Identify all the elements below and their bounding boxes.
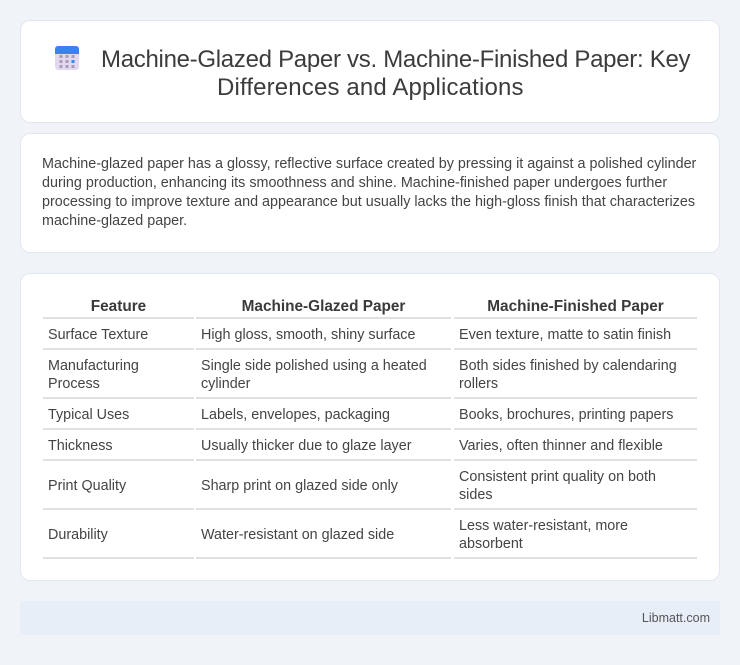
intro text <box>42 156 696 229</box>
comparison table: Both sides finished by calendaring <box>459 358 677 374</box>
intro text: machine-glazed paper. <box>42 213 187 229</box>
title: Machine-Glazed Paper vs. Machine-Finished Paper: Key <box>101 46 690 73</box>
title: Differences and Applications <box>217 74 524 101</box>
comparison table: sides <box>459 487 492 503</box>
comparison table: High gloss, smooth, shiny surface <box>201 327 415 343</box>
intro text: processing to improve texture and appearance but usually lacks the high-gloss finish that characterizes <box>42 194 695 210</box>
comparison table: rollers <box>459 376 498 392</box>
footer bar <box>20 601 720 635</box>
comparison table: Water-resistant on glazed side <box>201 527 394 543</box>
comparison table: Thickness <box>48 438 113 454</box>
comparison table: Surface Texture <box>48 327 148 343</box>
intro text: Machine-glazed paper has a glossy, reflective surface created by pressing it against a polished cylinder <box>42 156 696 172</box>
comparison table: Books, brochures, printing papers <box>459 407 673 423</box>
comparison table: Manufacturing <box>48 358 139 374</box>
comparison table: Typical Uses <box>48 407 129 423</box>
comparison table: Feature <box>91 298 146 315</box>
comparison table: Durability <box>48 527 108 543</box>
comparison table <box>43 298 697 559</box>
comparison table: Sharp print on glazed side only <box>201 478 398 494</box>
comparison table: Usually thicker due to glaze layer <box>201 438 411 454</box>
comparison table: Machine-Glazed Paper <box>242 298 405 315</box>
comparison table: Varies, often thinner and flexible <box>459 438 663 454</box>
panel: comparison table card <box>20 273 720 581</box>
intro text: during production, enhancing its smoothness and shine. Machine-finished paper undergoes further <box>42 175 667 191</box>
panel: title card <box>20 20 720 123</box>
comparison table: cylinder <box>201 376 250 392</box>
comparison table: Even texture, matte to satin finish <box>459 327 671 343</box>
icon: calendar <box>55 46 79 70</box>
comparison table: Less water-resistant, more <box>459 518 628 534</box>
comparison table: Print Quality <box>48 478 126 494</box>
comparison table: Consistent print quality on both <box>459 469 656 485</box>
comparison table: Single side polished using a heated <box>201 358 427 374</box>
footer credit: Libmatt.com <box>642 611 710 625</box>
comparison table: Process <box>48 376 100 392</box>
title <box>101 46 690 101</box>
comparison table: Machine-Finished Paper <box>487 298 664 315</box>
comparison table: absorbent <box>459 536 523 552</box>
comparison table: Labels, envelopes, packaging <box>201 407 390 423</box>
panel: intro card <box>20 133 720 253</box>
